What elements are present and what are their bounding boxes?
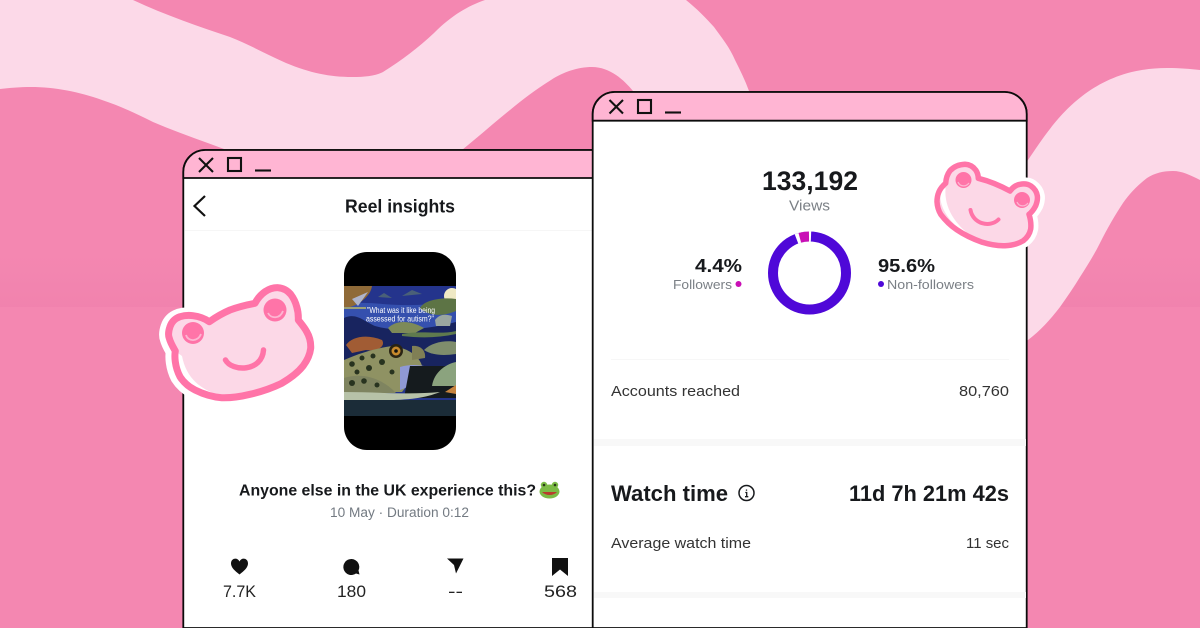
followers share: Followers [673,277,733,292]
stat: saves [544,558,577,601]
row: average watch time: Average watch time [611,535,751,552]
mouth [970,210,998,224]
reel thumbnail [344,252,460,450]
icon: info [739,486,754,500]
stat: likes: 7.7K [223,582,257,601]
reel title: Anyone else in the UK experience this? [239,482,536,500]
row: watch time [611,481,1009,506]
window controls [199,158,271,172]
stat: saves: 568 [544,582,577,601]
views total: 133,192 [762,166,858,196]
panel: views and watch time window [593,92,1027,628]
stat: comments: 180 [337,582,366,601]
icon: back chevron [194,196,205,216]
window controls [610,100,681,114]
panel: reel insights window [183,150,600,628]
row: accounts reached: 80,760 [959,383,1009,400]
stat: likes [223,559,257,601]
mouth [226,350,264,368]
title bar [183,150,600,178]
heading: Reel insights: Reel insights [345,196,455,216]
stat: comments [337,559,366,601]
icon: frog emoji [540,482,560,498]
row: accounts reached: Accounts reached [611,383,740,400]
background swoosh: left wave [0,0,749,170]
reel caption: "What was it like being [367,306,435,315]
eyes [182,298,286,344]
frog sticker: small [937,164,1038,246]
non-followers share: Non-followers [887,277,975,292]
row: average watch time [611,535,1009,552]
reel thumbnail: assessed for autism?" [366,314,434,324]
followers share [673,256,742,292]
background swoosh: right wave [1010,68,1200,350]
non-followers share [878,256,975,292]
views label: Views [789,198,830,214]
eyes [956,172,1030,208]
row: watch time: 11d 7h 21m 42s [849,481,1009,506]
followers share: 4.4% [695,256,742,276]
row: accounts reached [611,383,1009,400]
donut chart [773,236,846,310]
row: watch time: Watch time [611,481,728,506]
reel date and duration: 10 May · Duration 0:12 [330,505,469,520]
title bar [593,92,1027,121]
non-followers share: 95.6% [878,256,935,276]
frog sticker: large [168,288,311,398]
stat: shares: -- [448,582,463,601]
stat: shares [447,558,464,601]
row: average watch time: 11 sec [966,535,1009,552]
